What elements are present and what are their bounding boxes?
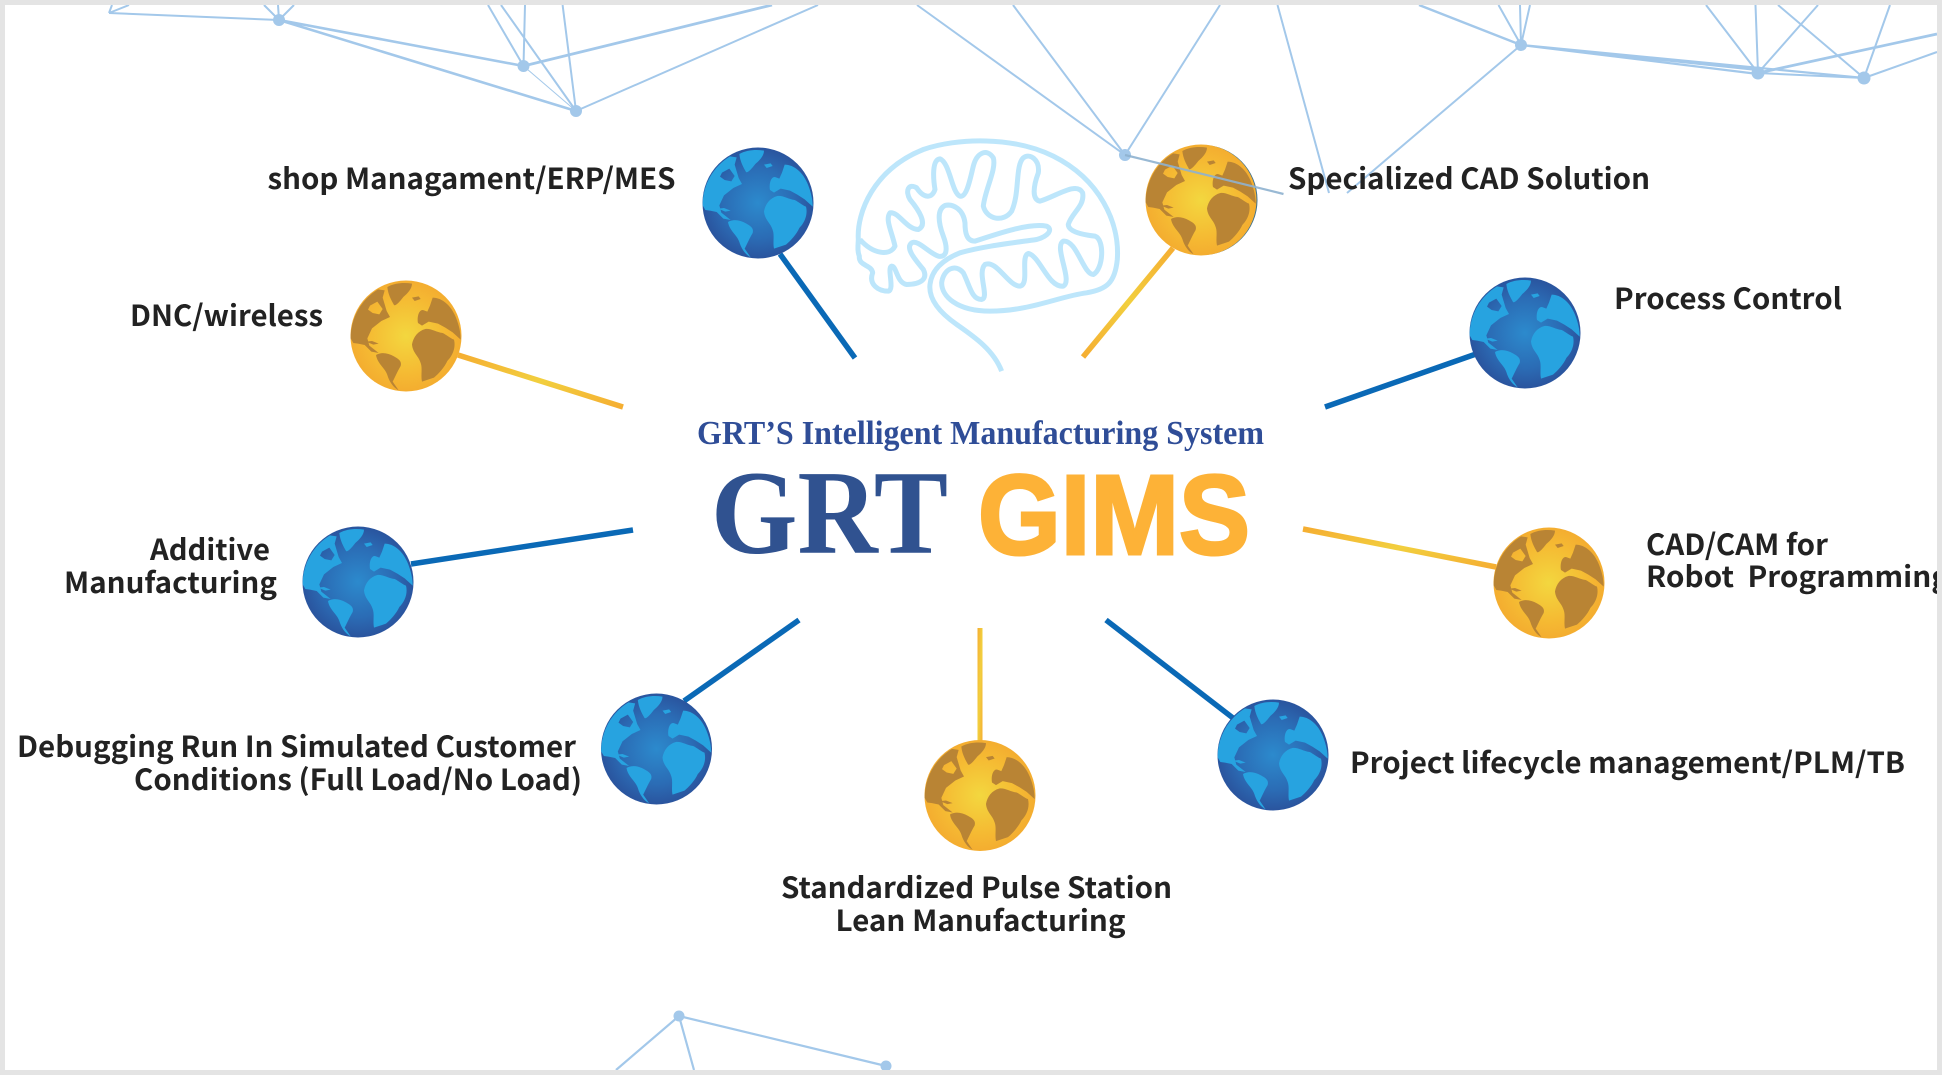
globe: debugging xyxy=(601,694,712,804)
connector: process control xyxy=(1325,354,1476,407)
title: GRT: GRT xyxy=(711,446,948,579)
label: ERP/MES: shop Managament/ERP/MES xyxy=(268,156,676,198)
network: bottom xyxy=(616,1010,892,1072)
connector: DNC xyxy=(458,355,623,407)
globe: pulse station xyxy=(924,740,1036,851)
globe: CAD/CAM xyxy=(1494,528,1604,638)
label: additive manufacturing: Additive xyxy=(149,527,270,569)
label: pulse station: Standardized Pulse Station xyxy=(781,865,1172,907)
label: pulse station: Lean Manufacturing xyxy=(836,898,1126,940)
label: additive manufacturing: Manufacturing xyxy=(64,560,277,602)
label: CAD/CAM: Robot Programming xyxy=(1646,554,1942,596)
globe: additive xyxy=(302,526,414,638)
label: CAD/CAM xyxy=(1646,522,1942,596)
label: PLM: Project lifecycle management/PLM/TB xyxy=(1350,740,1905,782)
label: debugging: Conditions (Full Load/No Load) xyxy=(134,757,582,799)
connector: debugging xyxy=(684,620,799,701)
label: pulse station xyxy=(781,865,1172,940)
label: DNC: DNC/wireless xyxy=(130,293,323,335)
network: top left xyxy=(109,5,818,117)
network: top right xyxy=(917,5,1937,193)
label: debugging: Debugging Run In Simulated Customer xyxy=(17,724,576,766)
label: CAD solution: Specialized CAD Solution xyxy=(1288,156,1650,198)
label: debugging xyxy=(17,724,582,799)
connector: additive xyxy=(411,530,633,564)
connector: CAD/CAM xyxy=(1303,529,1496,567)
connector: ERP/MES xyxy=(780,254,855,358)
globe: ERP/MES xyxy=(702,148,814,258)
globe: PLM xyxy=(1218,700,1328,810)
globe: process control xyxy=(1470,278,1580,388)
network line crossing gold globe xyxy=(1125,155,1284,194)
globe: DNC xyxy=(350,280,462,392)
title: GIMS: GIMS xyxy=(978,452,1250,578)
connector: pulse station xyxy=(978,628,982,744)
label: CAD/CAM: CAD/CAM for xyxy=(1646,522,1828,564)
subtitle: GRT’S Intelligent Manufacturing System xyxy=(697,415,1264,452)
connector: CAD solution xyxy=(1083,248,1173,357)
icon: brain outline xyxy=(858,141,1118,371)
label: process control: Process Control xyxy=(1614,276,1842,318)
label: additive manufacturing xyxy=(64,527,277,602)
connector: PLM xyxy=(1106,620,1233,718)
globe: CAD solution xyxy=(1146,144,1258,256)
